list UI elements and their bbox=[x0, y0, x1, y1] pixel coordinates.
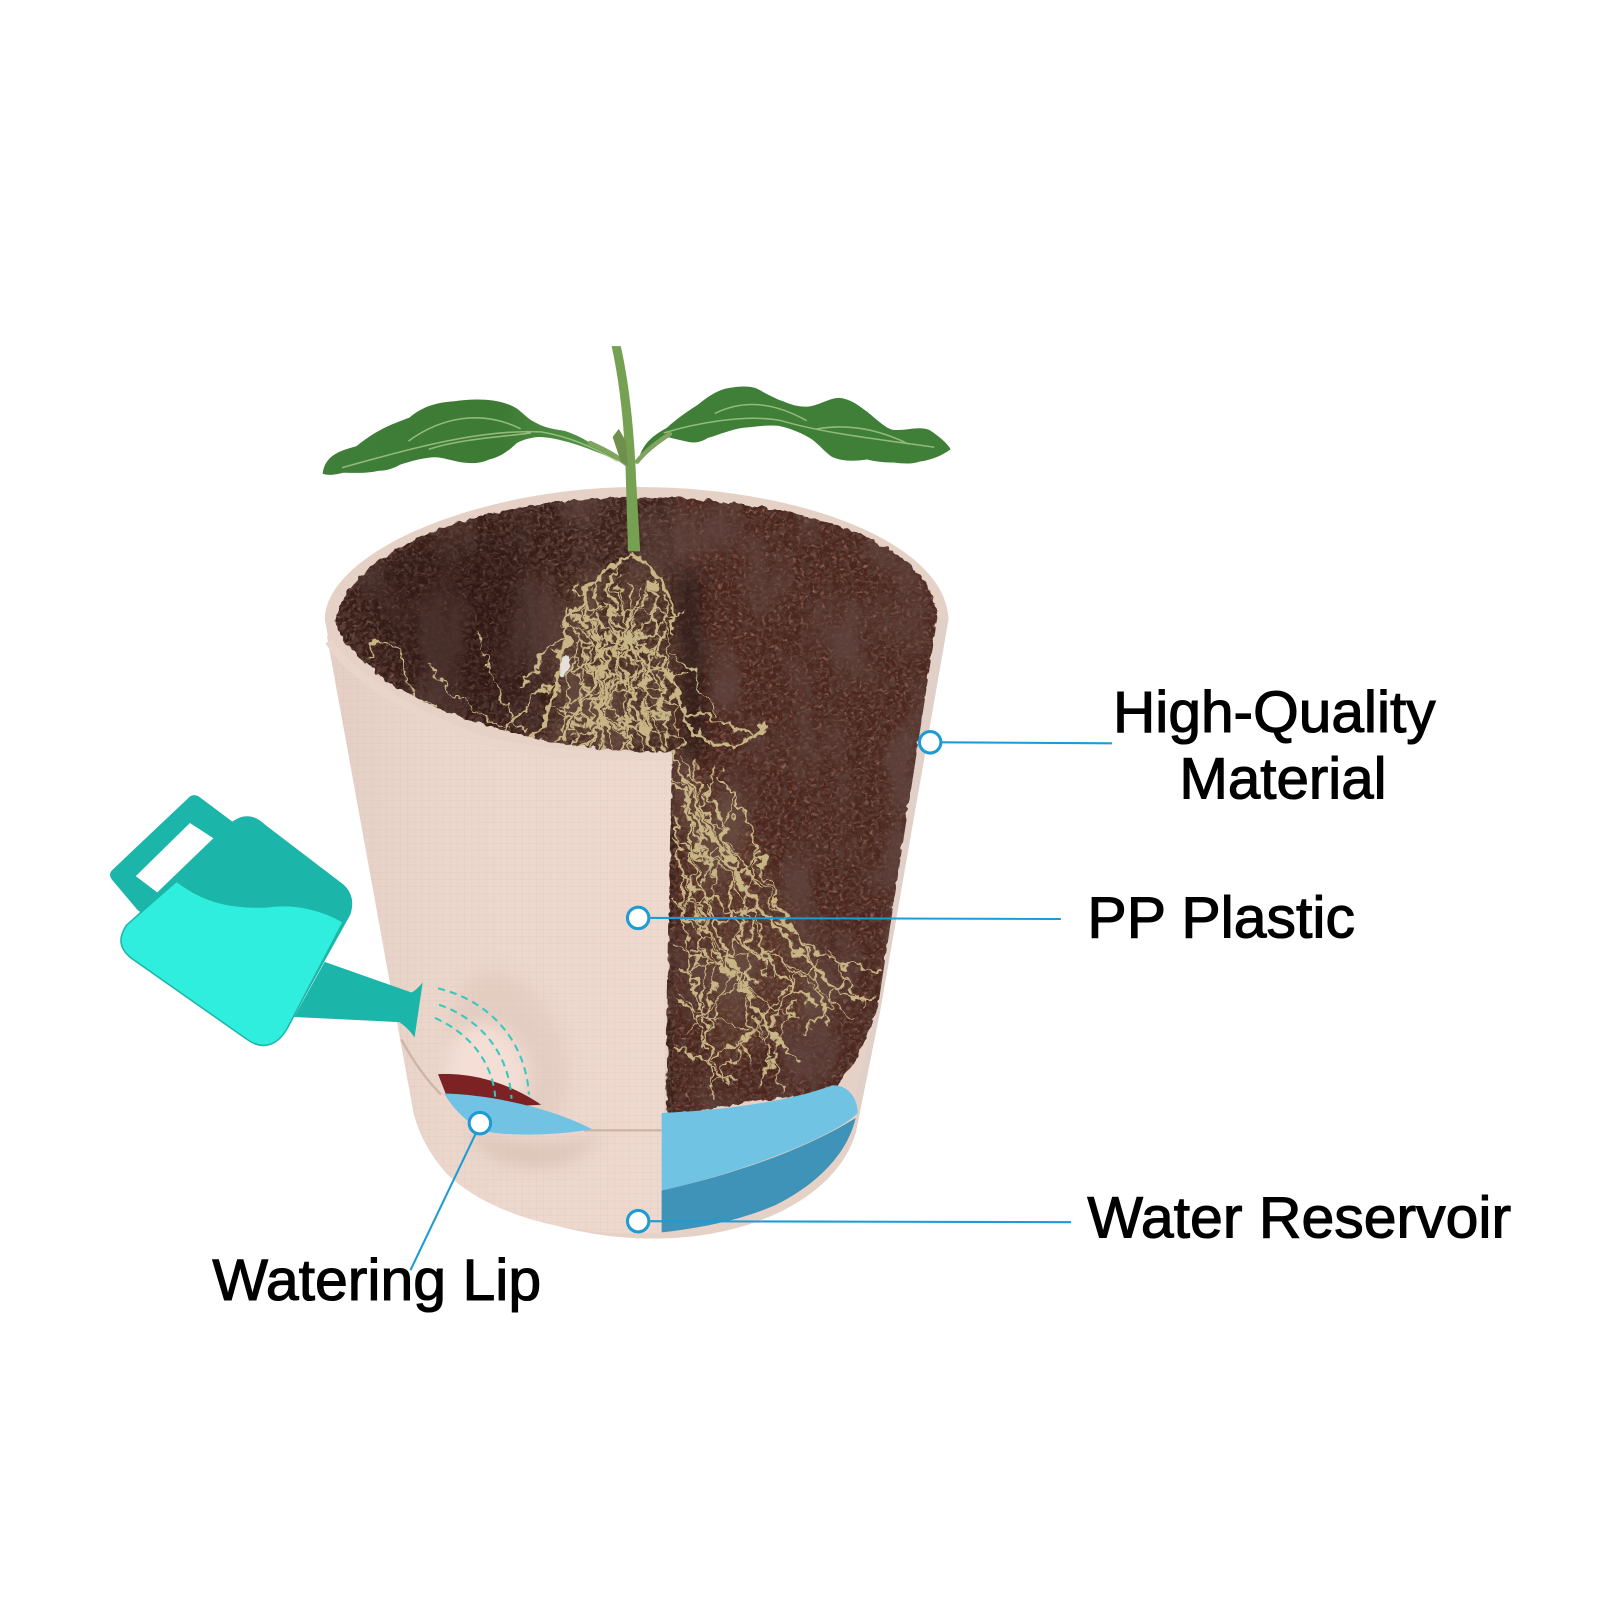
pot: outer silhouette bbox=[325, 487, 949, 1239]
watering lip recess shading bbox=[460, 978, 564, 1112]
soil cutaway bbox=[327, 490, 950, 1123]
watering lip opening bbox=[438, 1074, 592, 1135]
callout dot: water reservoir bbox=[627, 1210, 649, 1232]
label: Watering Lip: Watering Lip bbox=[212, 1248, 541, 1313]
label: Water Reservoir: Water Reservoir bbox=[1087, 1186, 1511, 1251]
pale root speck bbox=[560, 655, 570, 678]
callout dot: pp plastic bbox=[627, 907, 649, 929]
shadow: crease right of root ball bbox=[674, 572, 705, 756]
pot rim edge bbox=[329, 641, 672, 757]
leaf petioles bbox=[590, 434, 670, 468]
callout dot: high-quality material bbox=[919, 732, 941, 753]
leaf veins bbox=[342, 404, 934, 468]
right leaf bbox=[640, 386, 951, 464]
seam between pot and reservoir bbox=[401, 1039, 662, 1130]
right side wall highlight bbox=[856, 618, 949, 1133]
pot: front wall bbox=[327, 635, 672, 1233]
left leaf bbox=[323, 399, 621, 475]
label: PP Plastic: PP Plastic bbox=[1087, 885, 1355, 950]
plant roots bbox=[368, 556, 876, 1098]
watering can bbox=[110, 795, 423, 1045]
can body bbox=[121, 816, 352, 1045]
stem bbox=[612, 346, 640, 551]
can handle bbox=[110, 795, 237, 914]
plant: seedling bbox=[323, 346, 951, 551]
callout dot: watering lip bbox=[469, 1112, 491, 1134]
shadow: dark left soil bbox=[347, 521, 541, 735]
tan haze of root mass bbox=[541, 572, 837, 1072]
water flow dashed arcs bbox=[435, 988, 529, 1099]
water inside can bbox=[121, 881, 343, 1045]
label: High-Quality Material bbox=[1113, 680, 1436, 811]
infographic: self-watering pot cutaway bbox=[110, 346, 1511, 1312]
label: High-Quality Material: Material bbox=[1179, 746, 1387, 811]
water reservoir bbox=[662, 1085, 858, 1232]
axil bud bbox=[613, 429, 628, 466]
label: High-Quality Material: High-Quality bbox=[1113, 680, 1436, 745]
leader lines bbox=[410, 742, 1112, 1270]
can spout bbox=[294, 962, 423, 1037]
